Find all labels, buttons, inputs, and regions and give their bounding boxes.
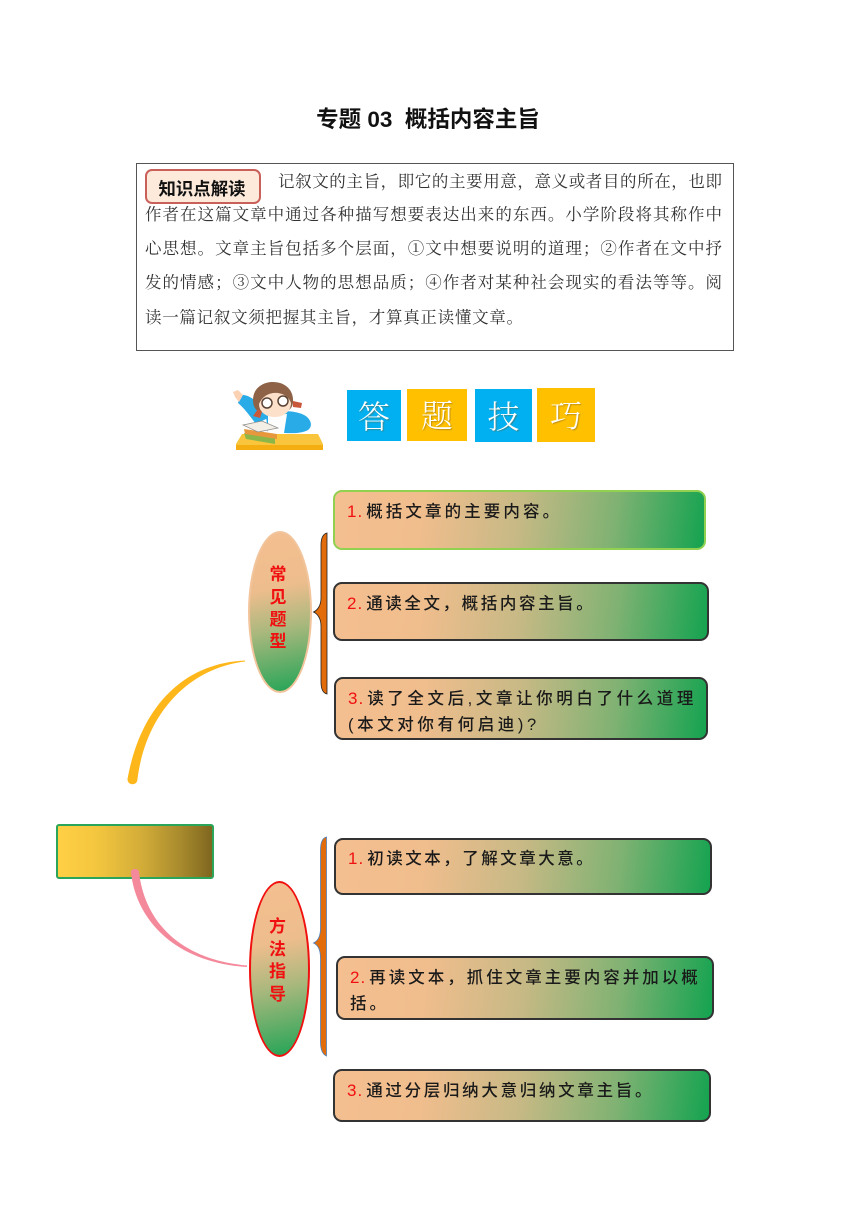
label char: 题 xyxy=(270,610,286,629)
tile: 技 xyxy=(475,389,532,442)
card: question type 2 xyxy=(333,582,709,641)
title: 专题 03 概括内容主旨 xyxy=(316,107,540,132)
connector: yellow curve xyxy=(128,660,245,784)
brace: method guidance xyxy=(312,836,327,1057)
icon: student at desk xyxy=(233,382,323,450)
central node xyxy=(56,824,214,879)
intro text line 3: 心思想。文章主旨包括多个层面，①文中想要说明的道理；②作者在文中抒 xyxy=(145,239,722,258)
tile: 题 xyxy=(407,389,467,441)
card text lines: 括。 xyxy=(350,995,389,1013)
label char: 见 xyxy=(270,588,286,607)
tile: 答 xyxy=(347,390,401,441)
card text: 2.通读全文，概括内容主旨。 xyxy=(347,594,595,613)
card: method 3 xyxy=(333,1069,711,1122)
card text lines xyxy=(350,968,701,1013)
card text lines xyxy=(348,689,697,734)
label char: 常 xyxy=(270,565,286,584)
intro text line 2: 作者在这篇文章中通过各种描写想要表达出来的东西。小学阶段将其称作中 xyxy=(145,205,722,224)
tile: 技: 技 xyxy=(487,399,520,435)
label char: 指 xyxy=(269,962,286,981)
badge: knowledge interpretation: 知识点解读 xyxy=(159,179,245,199)
card text lines: (本文对你有何启迪)? xyxy=(348,716,540,734)
oval: method guidance xyxy=(249,881,310,1057)
oval: common question types xyxy=(248,531,312,693)
label char: 导 xyxy=(269,985,286,1004)
card text: 1.初读文本，了解文章大意。 xyxy=(348,849,595,868)
tile: 巧: 巧 xyxy=(550,398,582,434)
intro text line 4: 发的情感；③文中人物的思想品质；④作者对某种社会现实的看法等等。阅 xyxy=(145,273,722,292)
tile: 巧 xyxy=(537,388,595,442)
badge: knowledge interpretation xyxy=(145,169,261,204)
brace: question types xyxy=(312,532,328,694)
card text: 1.概括文章的主要内容。 xyxy=(347,502,562,521)
card text: 3.通过分层归纳大意归纳文章主旨。 xyxy=(347,1081,654,1100)
card text lines: 3.读了全文后,文章让你明白了什么道理 xyxy=(348,689,697,708)
raised arm xyxy=(238,395,268,424)
intro text line 1: 记叙文的主旨，即它的主要用意，意义或者目的所在，也即 xyxy=(278,172,722,191)
card: method 2 xyxy=(336,956,714,1020)
label char: 法 xyxy=(269,940,286,959)
head xyxy=(253,382,302,418)
card: question type 3 xyxy=(334,677,708,740)
intro text line 5: 读一篇记叙文须把握其主旨，才算真正读懂文章。 xyxy=(145,308,523,327)
label char: 方 xyxy=(269,917,286,936)
panel: knowledge intro xyxy=(136,163,734,351)
body xyxy=(266,411,311,433)
tile: 题: 题 xyxy=(421,398,453,434)
card: method 1 xyxy=(334,838,712,895)
desk xyxy=(236,434,323,450)
card: question type 1 xyxy=(333,490,706,550)
books xyxy=(243,421,278,444)
connector: pink curve xyxy=(131,869,247,967)
hand xyxy=(233,390,243,402)
label char: 型 xyxy=(270,632,286,651)
card text lines: 2.再读文本，抓住文章主要内容并加以概 xyxy=(350,968,701,987)
tile: 答: 答 xyxy=(358,399,390,435)
